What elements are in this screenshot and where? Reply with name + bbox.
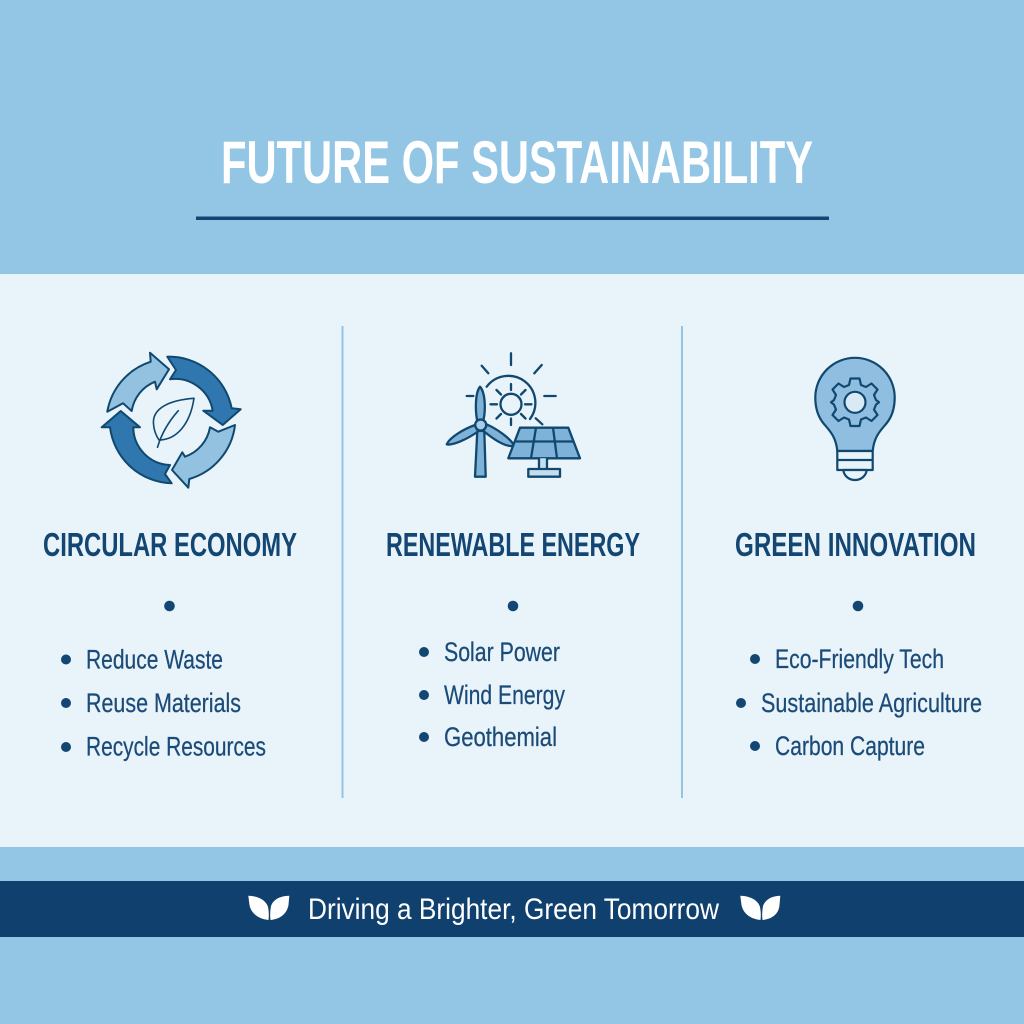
- list: renewable energy: Wind Energy: [444, 680, 566, 710]
- panel: content background: [0, 274, 1024, 847]
- list: circular economy: Recycle Resources: [86, 732, 266, 762]
- footer banner: [0, 881, 1024, 937]
- separator dot: [164, 601, 175, 611]
- separator dot: [508, 601, 518, 611]
- icon: left leaves: [248, 896, 289, 920]
- list: renewable energy: Geothemial: [444, 722, 557, 752]
- heading: renewable energy: RENEWABLE ENERGY: [386, 526, 640, 563]
- icon: gear: [831, 378, 879, 426]
- icon: right leaves: [740, 896, 780, 920]
- icon: leaf: [153, 398, 194, 447]
- panel: green innovation: [735, 358, 982, 761]
- heading: circular economy: CIRCULAR ECONOMY: [43, 526, 297, 563]
- list: green innovation: Carbon Capture: [775, 731, 925, 761]
- icon: light bulb with gear: [815, 358, 895, 480]
- panel: renewable energy: [386, 353, 640, 752]
- list: green innovation: [736, 644, 982, 761]
- icon: sun, wind turbine and solar panel: [447, 353, 580, 477]
- icon: recycling arrows with leaf: [102, 353, 241, 488]
- list: renewable energy: [419, 637, 566, 752]
- list: circular economy: [61, 644, 266, 762]
- separator dot: [853, 601, 863, 611]
- list: circular economy: Reuse Materials: [86, 688, 241, 718]
- list: circular economy: Reduce Waste: [86, 644, 223, 674]
- list: renewable energy: Solar Power: [444, 637, 560, 667]
- panel: circular economy: [43, 353, 297, 762]
- title underline: [196, 216, 829, 220]
- list: green innovation: Sustainable Agriculture: [761, 688, 982, 718]
- footer tagline: Driving a Brighter, Green Tomorrow: [308, 893, 719, 926]
- list: green innovation: Eco-Friendly Tech: [775, 644, 944, 674]
